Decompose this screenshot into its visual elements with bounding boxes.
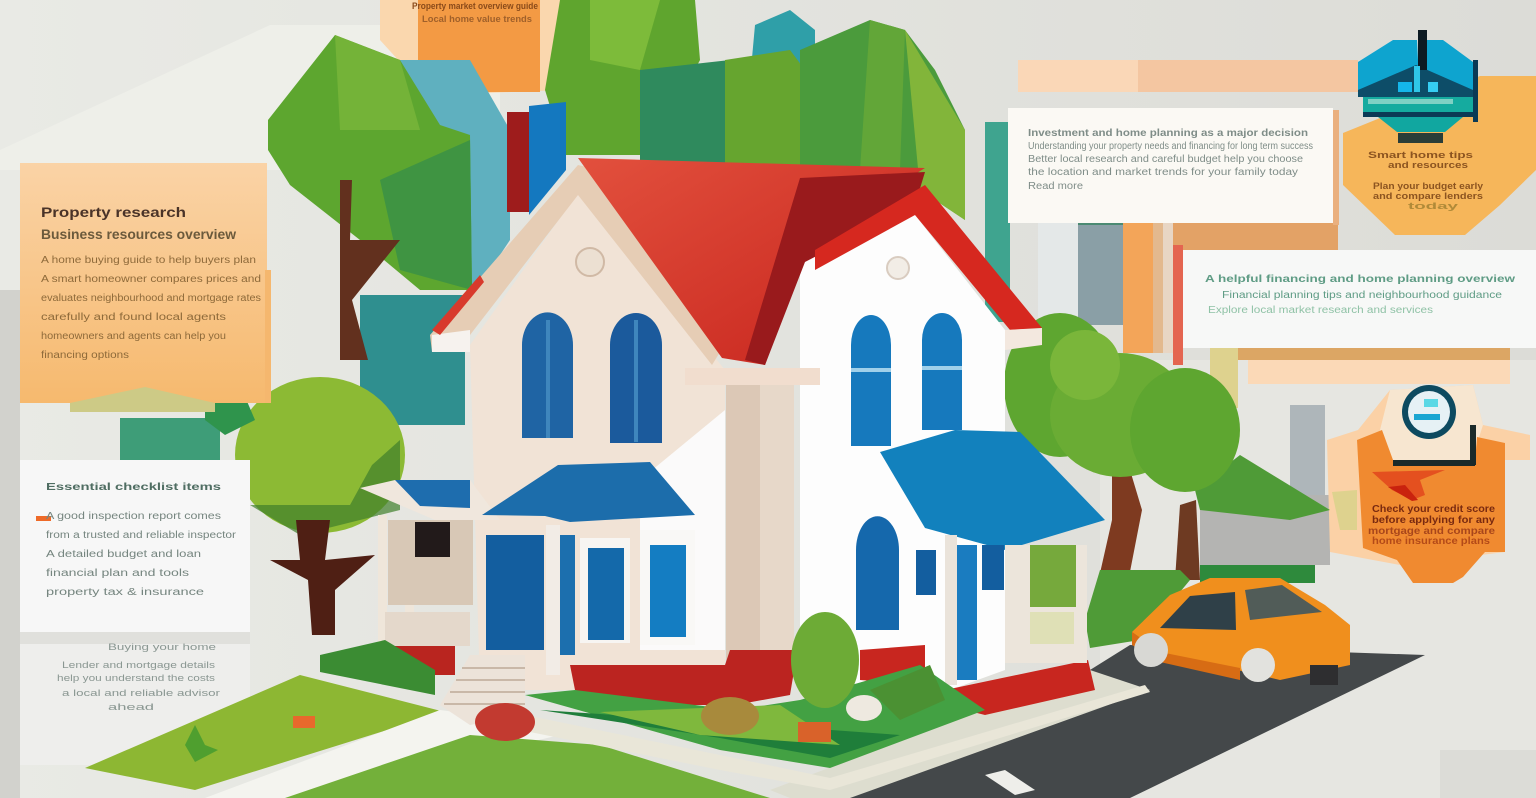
red foundation [570, 650, 795, 705]
rocks [475, 703, 535, 741]
panel: top right hexagon: Plan your budget early [1373, 181, 1483, 191]
panel: white left: from a trusted and reliable inspector [46, 530, 237, 541]
tree: left large [268, 35, 472, 360]
tree: lower left [205, 377, 405, 635]
panel: top right white: Better local research and careful budget help you choose [1028, 154, 1303, 165]
panel: white lower left: Lender and mortgage details [62, 660, 215, 671]
callout text: home insurance plans [1372, 536, 1490, 547]
top callout: orange box [380, 0, 565, 95]
right porch [916, 535, 1087, 685]
panel: top right white: Investment and home planning as a major decision [1028, 128, 1308, 139]
panel: orange left: Business resources overview [41, 226, 236, 242]
body text: homeowners and agents can help you [41, 331, 226, 342]
body text [41, 255, 261, 361]
panel: right lower orange [1210, 348, 1530, 583]
lower right window [856, 516, 899, 630]
dark roof side [745, 172, 925, 365]
panel: top right white: the location and market trends for your family today [1028, 167, 1298, 178]
central column [726, 385, 794, 670]
icon: house badge [1358, 30, 1478, 143]
panel: top right hexagon: Smart home tips [1368, 150, 1473, 160]
left gable trim [430, 165, 720, 365]
panel: white lower left: a local and reliable advisor [62, 688, 220, 699]
panel: right middle white [1183, 250, 1536, 348]
heading: Essential checklist items [46, 482, 222, 493]
right wing wall [800, 215, 1005, 690]
body text: evaluates neighbourhood and mortgage rates [41, 293, 261, 304]
panel: top right hexagon: and compare lenders [1373, 191, 1483, 201]
panel: orange left [20, 163, 271, 412]
callout text [1368, 504, 1495, 547]
panel: top right hexagon: and resources [1388, 160, 1468, 170]
buildings at right [1038, 205, 1338, 565]
steps [440, 655, 525, 725]
right gable roof edge [815, 185, 1042, 330]
panel: right middle white: A helpful financing and home planning overview [1205, 274, 1515, 285]
panel: white left: property tax & insurance [46, 587, 205, 598]
upper windows right [851, 313, 962, 446]
chimney [507, 102, 566, 215]
body text: financing options [41, 350, 129, 361]
panel: top right hexagon [1343, 30, 1536, 235]
panel: white lower left [20, 632, 250, 765]
callout text: before applying for any [1372, 515, 1495, 526]
panel: white left [20, 460, 250, 632]
tree: top canopy [545, 0, 700, 155]
panel: top right white [1008, 60, 1358, 225]
gable vents [576, 248, 604, 276]
beam [685, 368, 820, 385]
body text: A home buying guide to help buyers plan [41, 255, 256, 266]
right blue porch roof [880, 430, 1105, 550]
top callout text: Property market overview guide [412, 1, 538, 11]
panel: white left: A good inspection report comes [46, 511, 221, 522]
front garden [320, 612, 1150, 790]
main roof [578, 158, 925, 365]
heading: Property research [41, 204, 186, 220]
house [360, 102, 1105, 725]
upper windows left [522, 312, 662, 443]
callout text: mortgage and compare [1368, 526, 1495, 537]
callout text: Check your credit score [1372, 504, 1495, 515]
panel: right middle white: Explore local market research and services [1208, 305, 1433, 316]
panel: white left: financial plan and tools [46, 568, 189, 579]
panel: right middle white: Financial planning tips and neighbourhood guidance [1222, 290, 1503, 301]
panel: white left: A detailed budget and loan [46, 549, 201, 560]
body text: A smart homeowner compares prices and [41, 274, 261, 285]
background city and forest [120, 0, 965, 460]
panel: top right white: Read more [1028, 181, 1083, 192]
panel: white lower left: ahead [108, 702, 154, 713]
left porch [360, 480, 500, 646]
panel: top right white: Understanding your property needs and financing for long term success [1028, 141, 1313, 152]
icon: orange bullet [36, 516, 51, 521]
shrub [791, 612, 859, 708]
panel: white lower left: Buying your home [108, 642, 216, 653]
tall teal tower behind the house [985, 122, 1010, 322]
tree: right [1004, 313, 1330, 648]
road [770, 645, 1425, 798]
lawn [85, 675, 770, 798]
left blue porch roof [482, 462, 695, 522]
icon: orange car [1132, 578, 1350, 685]
icon: magnifier [1402, 385, 1456, 439]
entry door [486, 535, 544, 650]
panel: top right hexagon: today [1408, 201, 1458, 211]
panel: white lower left: help you understand the costs [57, 673, 215, 684]
top callout: orange box: Local home value trends [422, 14, 532, 24]
left wing wall [470, 190, 725, 690]
lower left windows [580, 538, 630, 643]
body text: carefully and found local agents [41, 312, 226, 323]
